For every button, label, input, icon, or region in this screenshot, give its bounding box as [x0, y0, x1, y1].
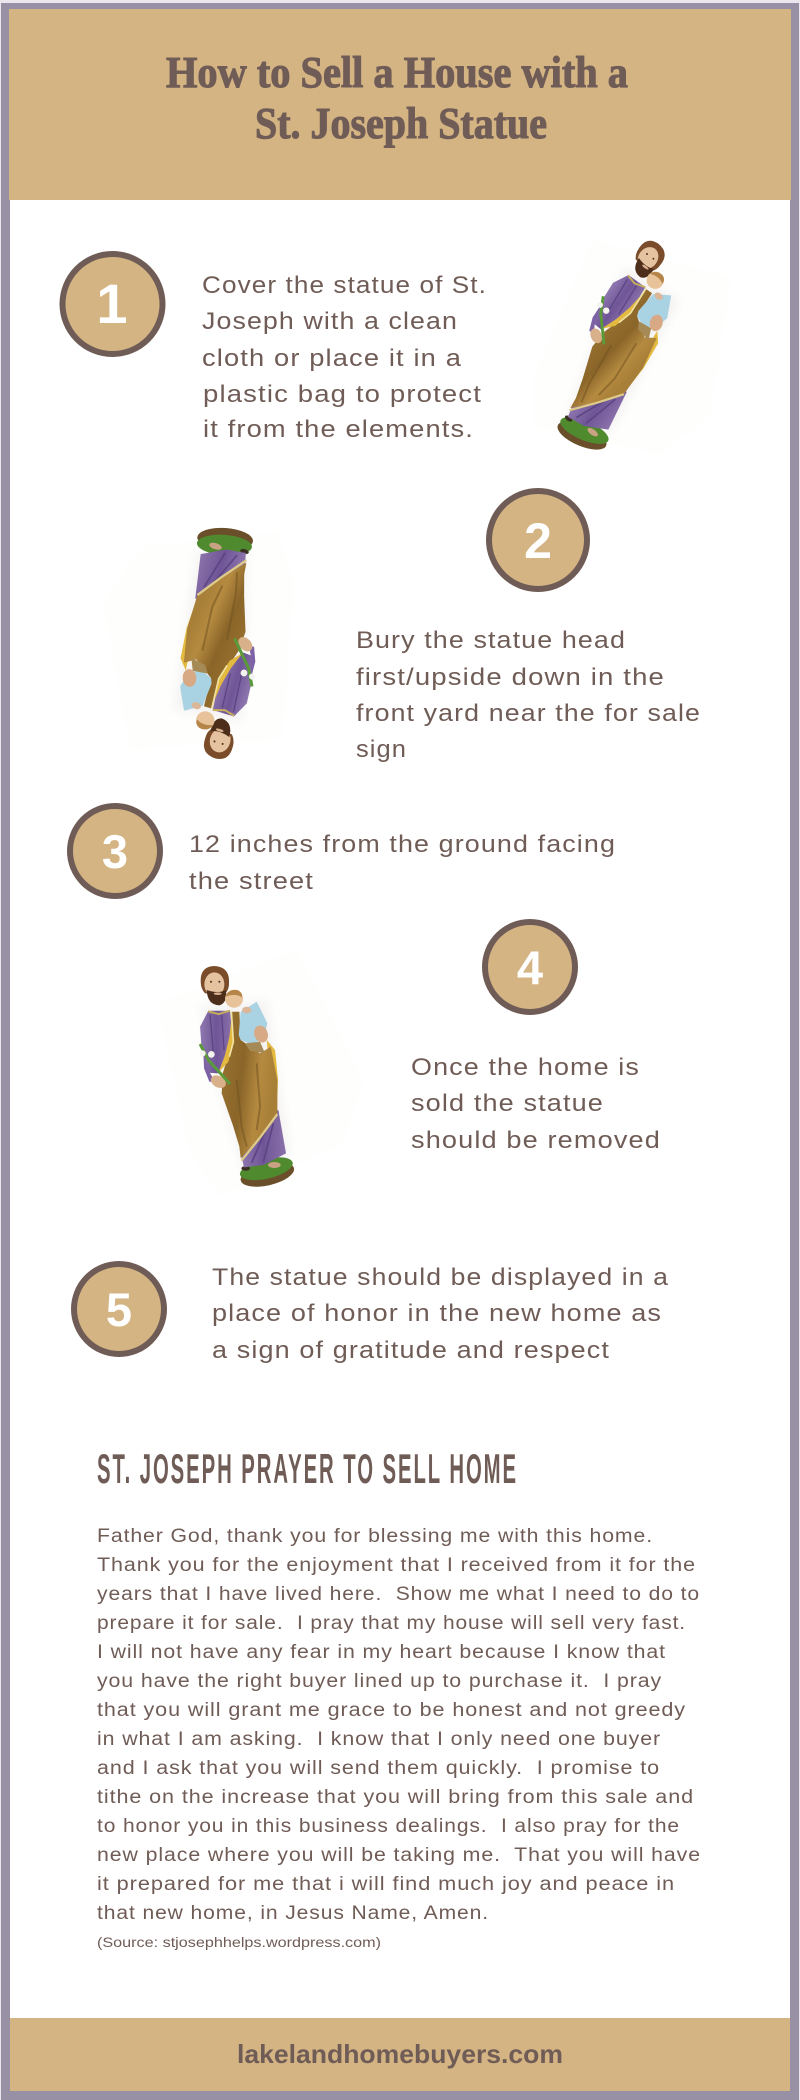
- prayer text: I will not have any fear in my heart because I know that: [97, 1642, 666, 1663]
- prayer text: prepare it for sale. I pray that my house will sell very fast.: [97, 1613, 686, 1634]
- step 3 text: the street: [189, 868, 314, 895]
- step 4 text: should be removed: [411, 1127, 661, 1154]
- step 1 number badge: 1: [96, 272, 128, 335]
- prayer text: years that I have lived here. Show me what I need to do to: [97, 1584, 700, 1605]
- title: [166, 48, 628, 148]
- step 1 text: Joseph with a clean: [202, 308, 458, 335]
- step 4 text: sold the statue: [411, 1090, 604, 1117]
- step 2 text: first/upside down in the: [356, 664, 665, 691]
- prayer text: that you will grant me grace to be honest and not greedy: [97, 1700, 686, 1721]
- prayer text: [97, 1526, 701, 1924]
- prayer text: Thank you for the enjoyment that I received from it for the: [97, 1555, 696, 1576]
- prayer text: that new home, in Jesus Name, Amen.: [97, 1903, 489, 1924]
- step 3 number badge: [70, 806, 160, 896]
- step 4 number badge: 4: [517, 941, 543, 994]
- prayer text: you have the right buyer lined up to purchase it. I pray: [97, 1671, 662, 1692]
- statue image upside down, step 2: [65, 489, 340, 791]
- step 1 text: [202, 272, 487, 443]
- step 5 text: [212, 1264, 669, 1364]
- step 5 text: The statue should be displayed in a: [212, 1264, 669, 1291]
- footer banner: [10, 2018, 790, 2091]
- step 4 number badge: [485, 922, 575, 1012]
- prayer text: in what I am asking. I know that I only need one buyer: [97, 1729, 661, 1750]
- prayer text: Father God, thank you for blessing me with this home.: [97, 1526, 653, 1547]
- step 3 text: 12 inches from the ground facing: [189, 831, 616, 858]
- prayer text: and I ask that you will send them quickly. I promise to: [97, 1758, 660, 1779]
- step 5 number badge: 5: [106, 1283, 132, 1336]
- prayer text: new place where you will be taking me. That you will have: [97, 1845, 701, 1866]
- step 2 text: front yard near the for sale: [356, 700, 701, 727]
- header banner: [9, 9, 791, 200]
- prayer text: it prepared for me that i will find much joy and peace in: [97, 1874, 675, 1895]
- step 2 number badge: 2: [524, 513, 552, 569]
- step 4 text: [411, 1054, 661, 1154]
- step 1 text: Cover the statue of St.: [202, 272, 487, 299]
- step 1 number badge: [62, 254, 162, 354]
- statue image, step 4: [157, 950, 363, 1197]
- step 3 number badge: 3: [102, 825, 128, 878]
- prayer text: tithe on the increase that you will bring from this sale and: [97, 1787, 694, 1808]
- step 1 text: it from the elements.: [203, 416, 474, 443]
- title: How to Sell a House with a: [166, 48, 628, 97]
- step 2 number badge: [489, 491, 587, 589]
- step 1 text: plastic bag to protect: [203, 381, 482, 408]
- step 2 text: sign: [356, 736, 407, 763]
- step 4 text: Once the home is: [411, 1054, 640, 1081]
- step 5 text: place of honor in the new home as: [212, 1300, 662, 1327]
- step 2 text: Bury the statue head: [356, 627, 626, 654]
- statue image, step 1: [483, 199, 783, 507]
- source note: (Source: stjosephhelps.wordpress.com): [97, 1934, 381, 1950]
- step 5 text: a sign of gratitude and respect: [212, 1337, 610, 1364]
- step 3 text: [189, 831, 616, 895]
- step 2 text: [356, 627, 701, 763]
- step 5 number badge: [74, 1264, 164, 1354]
- prayer text: to honor you in this business dealings. I also pray for the: [97, 1816, 680, 1837]
- title: St. Joseph Statue: [255, 99, 547, 148]
- website: lakelandhomebuyers.com: [237, 2039, 563, 2069]
- step 1 text: cloth or place it in a: [202, 345, 462, 372]
